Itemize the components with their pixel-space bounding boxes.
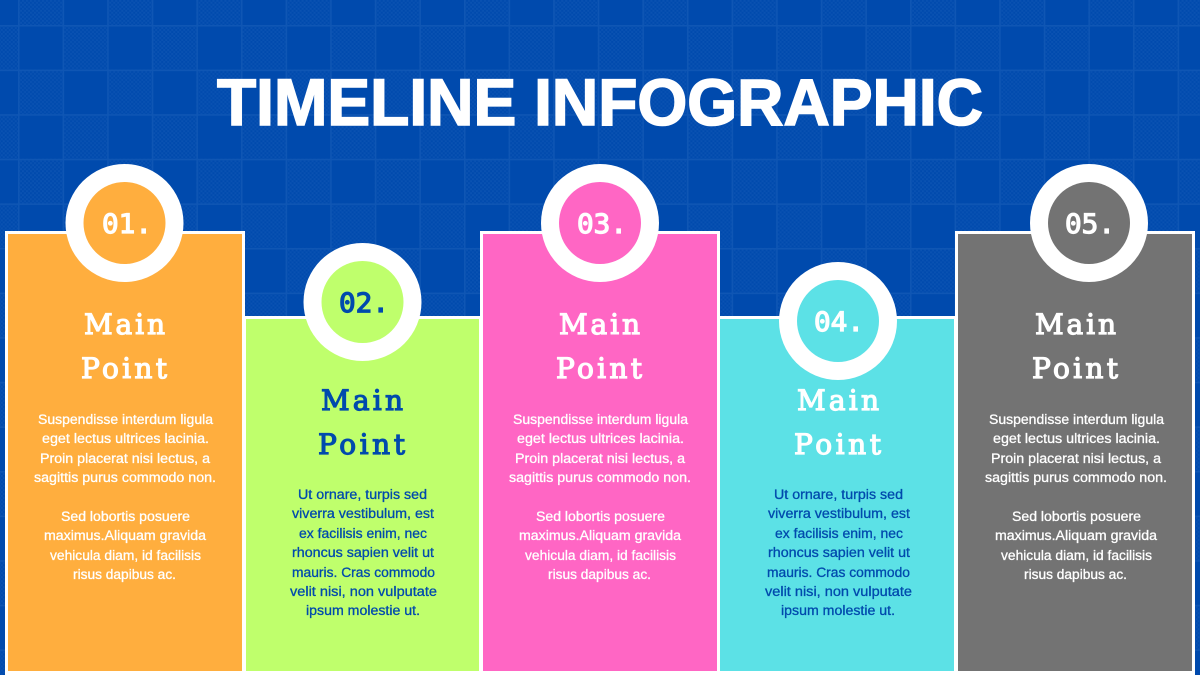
number badge 03 — [541, 164, 659, 282]
body text: vehicula diam, id facilisis — [525, 548, 676, 563]
heading: Point — [318, 428, 406, 461]
heading: Point — [556, 352, 643, 385]
body text: Sed lobortis posuere — [61, 509, 190, 524]
body text: Ut ornare, turpis sed — [774, 487, 903, 502]
heading: Main — [559, 308, 640, 341]
heading: Main — [1035, 308, 1116, 341]
heading — [556, 308, 643, 385]
body text: ex facilisis enim, nec — [775, 526, 903, 541]
body text: Suspendisse interdum ligula — [513, 412, 688, 427]
number badge 05: 05. — [1065, 209, 1115, 240]
body text: mauris. Cras commodo — [292, 565, 435, 580]
heading — [318, 384, 406, 461]
heading — [81, 308, 168, 385]
panel: step 4 — [717, 262, 958, 675]
number badge 04 — [779, 262, 897, 380]
body text — [290, 487, 437, 618]
body text: Proin placerat nisi lectus, a — [991, 451, 1162, 466]
body text: eget lectus ultrices lacinia. — [993, 431, 1160, 446]
body text: sagittis purus commodo non. — [34, 470, 216, 485]
body text: eget lectus ultrices lacinia. — [42, 431, 209, 446]
heading — [794, 384, 882, 461]
number badge 02 — [304, 243, 422, 361]
body text: risus dapibus ac. — [1024, 567, 1127, 582]
body text: risus dapibus ac. — [548, 567, 651, 582]
body text: vehicula diam, id facilisis — [1001, 548, 1152, 563]
body text: rhoncus sapien velit ut — [768, 545, 910, 560]
heading: Main — [321, 384, 403, 417]
body text: viverra vestibulum, est — [768, 506, 910, 521]
body text: viverra vestibulum, est — [292, 506, 434, 521]
number badge 02: 02. — [339, 288, 389, 319]
body text: ipsum molestie ut. — [306, 603, 420, 618]
heading: Point — [1032, 352, 1119, 385]
heading: Point — [794, 428, 882, 461]
number badge 01: 01. — [102, 209, 152, 240]
body text — [985, 412, 1167, 582]
body text: velit nisi, non vulputate — [290, 584, 437, 599]
number badge 04: 04. — [814, 307, 864, 338]
body text: Sed lobortis posuere — [536, 509, 665, 524]
title: TIMELINE INFOGRAPHIC — [217, 65, 983, 139]
panel: step 5 — [955, 164, 1195, 675]
body text: ipsum molestie ut. — [781, 603, 895, 618]
body text: ex facilisis enim, nec — [299, 526, 427, 541]
body text — [765, 487, 912, 618]
body text: Suspendisse interdum ligula — [38, 412, 213, 427]
body text: mauris. Cras commodo — [767, 565, 910, 580]
body text: maximus.Aliquam gravida — [519, 528, 682, 543]
body text: maximus.Aliquam gravida — [995, 528, 1158, 543]
body text: Proin placerat nisi lectus, a — [515, 451, 686, 466]
heading: Main — [797, 384, 879, 417]
heading: Main — [84, 308, 165, 341]
body text: risus dapibus ac. — [73, 567, 176, 582]
body text: velit nisi, non vulputate — [765, 584, 912, 599]
heading — [1032, 308, 1119, 385]
body text: rhoncus sapien velit ut — [292, 545, 434, 560]
body text: Proin placerat nisi lectus, a — [40, 451, 211, 466]
body text: Ut ornare, turpis sed — [298, 487, 427, 502]
body text — [34, 412, 216, 582]
body text: Suspendisse interdum ligula — [989, 412, 1164, 427]
heading: Point — [81, 352, 168, 385]
body text: sagittis purus commodo non. — [509, 470, 691, 485]
panel: step 3 — [480, 164, 720, 675]
body text: vehicula diam, id facilisis — [50, 548, 201, 563]
panel: step 1 — [5, 164, 245, 675]
body text: sagittis purus commodo non. — [985, 470, 1167, 485]
number badge 01 — [66, 164, 184, 282]
number badge 05 — [1030, 164, 1148, 282]
body text: eget lectus ultrices lacinia. — [517, 431, 684, 446]
body text: maximus.Aliquam gravida — [44, 528, 207, 543]
panel: step 2 — [243, 243, 483, 675]
body text — [509, 412, 691, 582]
number badge 03: 03. — [577, 209, 627, 240]
body text: Sed lobortis posuere — [1012, 509, 1141, 524]
